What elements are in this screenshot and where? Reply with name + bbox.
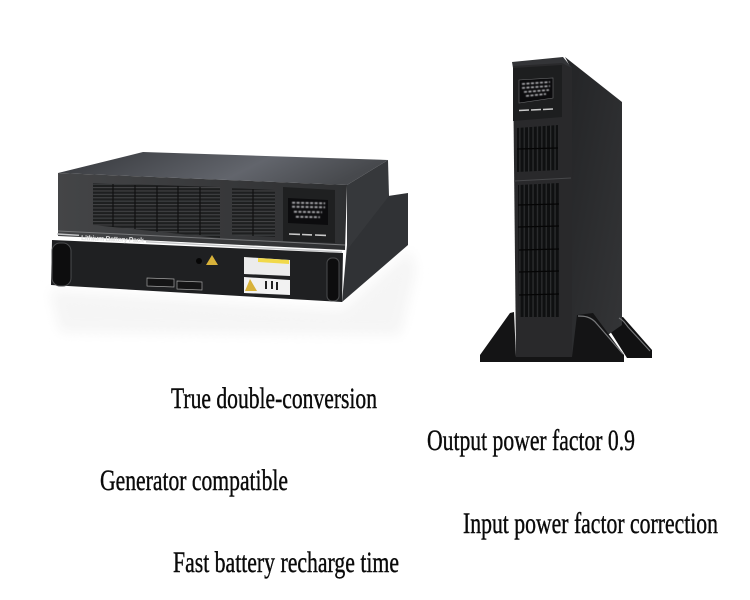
display block bbox=[513, 65, 562, 121]
display panel bbox=[283, 187, 335, 243]
battery vent, small bbox=[232, 188, 275, 237]
power knob bbox=[196, 258, 202, 264]
warning triangle bbox=[206, 255, 218, 265]
vent centre divider bbox=[252, 189, 254, 236]
upper front face bbox=[58, 173, 347, 250]
trim line upper bbox=[58, 231, 345, 245]
output socket bbox=[177, 281, 202, 290]
warning label bbox=[244, 277, 290, 295]
vent divider bars bbox=[518, 204, 559, 295]
front foot bbox=[480, 312, 624, 362]
LCD screen bbox=[288, 198, 328, 225]
top face bbox=[58, 152, 388, 185]
vent column dividers bbox=[113, 184, 200, 235]
panel: tower UPS bbox=[480, 57, 652, 362]
LCD screen bbox=[519, 78, 553, 103]
battery vent, large bbox=[93, 183, 220, 238]
tower front face bbox=[513, 63, 572, 357]
right handle bbox=[327, 258, 339, 301]
upper chassis side bbox=[347, 160, 389, 250]
breaker switch bbox=[147, 278, 174, 287]
LCD digits bbox=[522, 82, 550, 96]
tower top bbox=[512, 57, 572, 68]
panel buttons bbox=[289, 234, 326, 235]
lower chassis side bbox=[342, 193, 408, 302]
feature: fast battery recharge time: Fast battery recharge time bbox=[173, 546, 399, 579]
feature: generator compatible: Generator compatible bbox=[100, 464, 288, 497]
upper vent divider bbox=[517, 148, 558, 149]
tower side face bbox=[565, 57, 622, 360]
panel: rack-mounted lithium battery pack bbox=[50, 152, 416, 335]
feature: output power factor: Output power factor 0.9 bbox=[427, 424, 635, 457]
feature: true double-conversion: True double-conversion bbox=[171, 382, 377, 415]
floor reflection bbox=[50, 250, 416, 335]
front trim line bbox=[57, 234, 342, 252]
lower vent bbox=[518, 183, 559, 317]
buttons bbox=[519, 109, 553, 110]
left handle bbox=[52, 243, 71, 286]
brand label: Lithium Battery Pack bbox=[81, 235, 144, 245]
divider between modules bbox=[514, 178, 571, 181]
caution label bbox=[244, 257, 290, 276]
foot highlights bbox=[578, 316, 650, 354]
lower front panel bbox=[51, 240, 343, 302]
upper vent bbox=[517, 125, 558, 172]
LCD digits bbox=[292, 203, 325, 217]
rear foot bbox=[603, 317, 652, 358]
